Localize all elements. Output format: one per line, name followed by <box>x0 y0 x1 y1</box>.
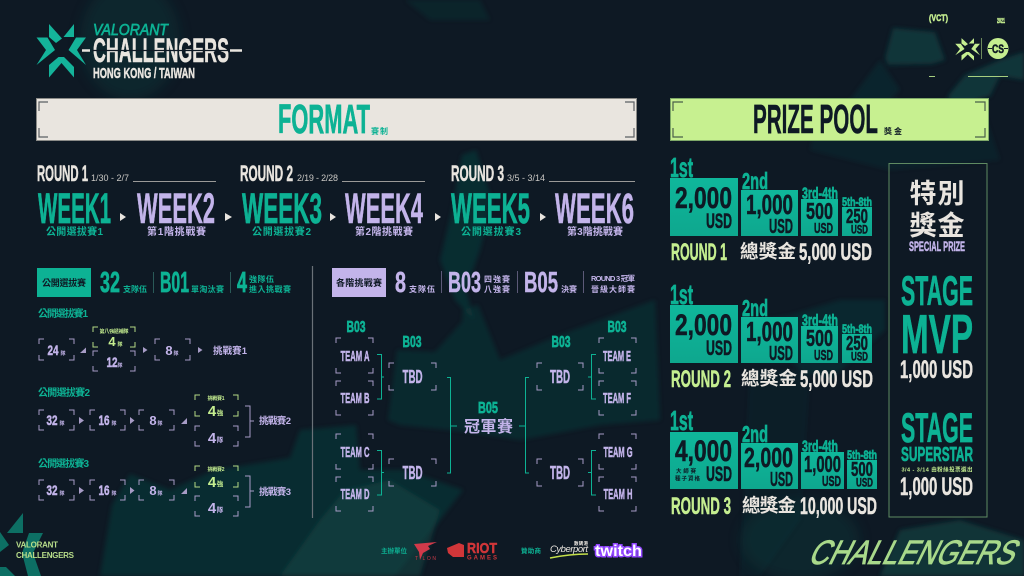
qualifier 2 flow <box>38 386 291 447</box>
bracket: right side: TBD <box>550 463 570 483</box>
panel: open qualifier <box>37 267 291 517</box>
qualifier 2 flow: 隊 <box>59 420 65 427</box>
panel: prize round 1 <box>670 152 872 266</box>
5th-8th prize: 250 <box>846 333 868 355</box>
heading: 特別獎金: 特別 <box>910 179 964 209</box>
3rd-4th prize: USD <box>814 220 833 237</box>
total: 總獎金 <box>741 368 797 389</box>
1st prize: 大師賽 <box>676 467 696 475</box>
stat: B03: 八強賽 <box>484 284 510 294</box>
3rd-4th prize: 3rd-4th <box>802 186 838 202</box>
stat: top 4: 進入挑戰賽 <box>249 284 291 294</box>
2nd prize: 2nd <box>742 295 768 321</box>
award: stage superstar: SUPERSTAR <box>901 444 973 466</box>
qualifier 3 flow: 公開選拔賽3 <box>38 457 89 470</box>
qualifier 3 flow: 8 <box>149 483 157 498</box>
heading: 特別獎金 <box>910 179 964 241</box>
qualifier 3 flow: 強 <box>217 479 224 488</box>
heading: 賽制: 賽 制 <box>371 126 388 136</box>
qualifier 3 flow: 32 <box>46 482 58 498</box>
qualifier 3 flow: 4 <box>208 500 217 517</box>
week 2: 第1階挑戰賽 <box>147 225 206 238</box>
stat: top 4 <box>237 267 291 299</box>
qualifier 2 flow: 4 <box>208 403 217 420</box>
arrow <box>225 213 232 221</box>
stat: B05: 決賽 <box>561 284 577 294</box>
week 3: WEEK3 <box>242 185 322 233</box>
bracket: left side: B03 <box>402 334 422 351</box>
qualifier 3 flow: 隊 <box>217 505 224 514</box>
3rd-4th prize <box>801 438 844 490</box>
footer: sponsors <box>521 540 642 560</box>
1st prize: 4,000 <box>675 435 732 468</box>
panel: prize header <box>670 96 988 142</box>
round 3 heading <box>451 161 635 186</box>
bracket: final: B05 <box>478 400 498 417</box>
logo: Cyberport: 數碼港 <box>574 540 588 547</box>
1st prize: 1st <box>670 279 693 310</box>
round label: ROUND 3 <box>671 493 731 520</box>
stat: B01: 單淘汰賽 <box>191 284 224 294</box>
tag: 各階挑戰賽 <box>332 268 386 297</box>
stat: 32 teams <box>100 267 147 299</box>
bracket: left side: B03 <box>346 319 366 336</box>
stat: top 4: 強隊伍 <box>249 274 274 284</box>
3rd-4th prize: 500 <box>806 198 833 224</box>
bracket: left side: TEAM D <box>340 487 370 503</box>
5th-8th prize: 5th-8th <box>842 322 872 336</box>
5th-8th prize <box>842 322 872 364</box>
logo: Riot Games: RIOT <box>467 541 497 557</box>
tag: 各階挑戰賽: 各階挑戰賽 <box>336 277 382 288</box>
qualifier 1 flow: 挑戰賽1 <box>213 345 248 357</box>
bracket: right side: TBD <box>550 367 570 387</box>
bracket: left side: TEAM A <box>340 349 370 365</box>
qualifier 2 flow: 4 <box>208 430 217 447</box>
2nd prize <box>741 295 798 365</box>
qualifier 2 flow: 8 <box>149 413 157 428</box>
week 6: 第3階挑戰賽 <box>567 225 623 238</box>
bracket: left side <box>336 319 457 511</box>
footer: sponsors: 贊助商 <box>521 546 542 555</box>
2nd prize <box>741 421 798 491</box>
qualifier 1 flow: 隊 <box>117 341 123 348</box>
panel: schedule: WEEK1 <box>38 185 111 233</box>
panel: prize round 3 <box>670 405 877 520</box>
arrow <box>435 213 441 221</box>
week 4: WEEK4 <box>345 185 423 233</box>
arrow <box>540 213 546 221</box>
3rd-4th prize: USD <box>822 473 841 490</box>
footer: left logo mark <box>0 513 43 576</box>
3rd-4th prize: USD <box>814 347 833 364</box>
logo: Twitch: twitch <box>595 543 642 560</box>
footer: valorant challengers <box>16 540 75 560</box>
1st prize <box>670 152 738 236</box>
week 2 <box>137 185 215 238</box>
stat: 8 teams: 8 <box>395 267 406 299</box>
stat: round 3 champion: ROUND 3 冠軍 <box>591 274 636 283</box>
qualifier 1 flow: 8 <box>165 343 173 358</box>
3rd-4th prize <box>801 312 838 364</box>
round 3 heading: ROUND 3 <box>451 161 504 186</box>
total: 總獎金 <box>740 241 796 262</box>
round 3 heading: 3/5 - 3/14 <box>507 173 545 183</box>
round label: ROUND 2 <box>671 366 731 393</box>
bracket: left side: TBD <box>402 367 422 387</box>
qualifier 2 flow: 挑戰賽2 <box>259 415 291 427</box>
bracket: right side: TEAM F <box>603 391 631 407</box>
bracket: right side <box>519 319 636 511</box>
total: 5,000 USD <box>799 239 872 266</box>
qualifier 3 flow: 挑戰賽2 <box>208 466 225 473</box>
1st prize <box>670 279 738 363</box>
2nd prize: 1,000 <box>746 316 793 347</box>
footer: valorant challengers: VALORANT <box>16 540 58 550</box>
2nd prize: USD <box>769 343 793 365</box>
footer: valorant challengers: CHALLENGERS <box>16 551 75 560</box>
qualifier 2 flow: 公開選拔賽2 <box>38 386 90 399</box>
logo: Cyberport <box>550 540 588 558</box>
1st prize: 1st <box>670 405 693 436</box>
qualifier 3 flow <box>38 457 291 517</box>
stat: B03: B03 <box>448 267 481 299</box>
1st prize: USD <box>706 210 732 233</box>
qualifier 2 flow: 隊 <box>111 420 117 427</box>
stat: top 4: 4 <box>237 267 247 299</box>
week 5 <box>451 185 530 238</box>
5th-8th prize: USD <box>851 350 868 364</box>
2nd prize: 1,000 <box>746 189 793 220</box>
1st prize: USD <box>706 337 732 360</box>
heading: FORMAT: FORMAT <box>278 96 370 142</box>
week 6 <box>555 185 634 238</box>
bracket: right side: TEAM E <box>603 349 631 365</box>
stat: 8 teams <box>395 267 435 299</box>
qualifier 2 flow: 16 <box>98 412 110 428</box>
qualifier 1 flow: 公開選拔賽1 <box>38 307 88 320</box>
1st prize: 2,000 <box>675 182 732 215</box>
arrow <box>330 213 336 221</box>
heading: 特別獎金: 獎金 <box>910 211 964 241</box>
brand: VALORANT: VALORANT <box>93 22 169 39</box>
icon: VCT logo <box>36 24 86 78</box>
logo: Valorant Challengers <box>36 22 242 82</box>
panel: format header <box>36 96 636 142</box>
round label: ROUND 1 <box>671 239 727 266</box>
3rd-4th prize: 3rd-4th <box>802 438 838 456</box>
footer: organisers: 主辦單位 <box>381 546 408 555</box>
brand: region: HONG KONG / TAIWAN <box>93 65 195 82</box>
round 2 heading: ROUND 2 <box>240 161 293 186</box>
qualifier 3 flow: 隊 <box>111 490 117 497</box>
round 1 heading: ROUND 1 <box>37 161 88 186</box>
qualifier 2 flow: 隊 <box>157 420 163 427</box>
qualifier 1 flow: 隊 <box>173 350 179 357</box>
icon: CS badge: CS <box>992 42 1004 56</box>
panel: prize round 2 <box>670 279 873 393</box>
brand: CHALLENGERS: CHALLENGERS <box>93 32 229 70</box>
round 1 heading <box>37 161 216 186</box>
award: stage superstar: 1,000 USD <box>900 473 973 501</box>
top-right VCT mark <box>929 13 1008 76</box>
2nd prize: USD <box>769 216 793 238</box>
bracket: final <box>464 400 513 436</box>
5th-8th prize: USD <box>856 476 873 490</box>
week 4 <box>345 185 423 238</box>
5th-8th prize <box>842 195 872 236</box>
stat: round 3 champion <box>591 274 636 294</box>
week 1 <box>38 185 111 238</box>
award: stage MVP: MVP <box>901 303 973 365</box>
5th-8th prize: 5th-8th <box>842 195 872 209</box>
label: VCT: (VCT) <box>929 13 948 23</box>
1st prize: 種子資格 <box>675 474 700 482</box>
total: 5,000 USD <box>800 366 873 393</box>
3rd-4th prize: 1,000 <box>804 451 841 477</box>
award: stage MVP <box>900 267 973 384</box>
qualifier 1 flow: 隊 <box>60 350 66 357</box>
panel: special prize <box>889 164 987 517</box>
5th-8th prize <box>847 448 877 490</box>
stat: 8 teams: 支隊伍 <box>409 284 435 294</box>
qualifier 1 flow: 4 <box>108 334 116 349</box>
bracket: right side: TEAM H <box>604 487 632 503</box>
round 2 heading: 2/19 - 2/28 <box>297 173 338 183</box>
tag: 公開選拔賽: 公開選拔賽 <box>42 277 86 288</box>
logo: Riot Games <box>447 541 497 562</box>
qualifier 3 flow: 4 <box>208 474 217 491</box>
1st prize: USD <box>706 463 732 486</box>
heading: PRIZE POOL: PRIZE POOL <box>753 96 878 142</box>
stat: B01: B01 <box>160 267 189 299</box>
qualifier 3 flow: 16 <box>98 482 110 498</box>
logo: Talon: T LON <box>415 556 436 562</box>
qualifier 2 flow: 強 <box>217 408 224 417</box>
3rd-4th prize <box>801 186 838 237</box>
2nd prize: USD <box>770 469 793 491</box>
qualifier 1 flow: 12 <box>106 354 118 370</box>
week 5: 公開選拔賽3 <box>461 225 521 238</box>
award: stage superstar: 3/4 - 3/14 由粉絲投票選出 <box>902 466 972 474</box>
qualifier 1 flow <box>38 307 248 371</box>
arrow <box>120 213 126 221</box>
week 3 <box>242 185 322 238</box>
5th-8th prize: 5th-8th <box>847 448 877 462</box>
bracket: left side: TEAM B <box>340 391 370 407</box>
panel: challengers stage <box>332 267 636 511</box>
bracket: left side: TBD <box>402 463 422 483</box>
week 6: WEEK6 <box>555 185 634 233</box>
award: stage MVP: 1,000 USD <box>900 356 973 384</box>
bracket: right side: B03 <box>608 319 627 336</box>
panel: schedule <box>37 161 635 238</box>
1st prize: 2,000 <box>675 309 732 342</box>
qualifier 1 flow: 第八強遞補隊 <box>100 328 128 335</box>
round 2 heading <box>240 161 425 186</box>
1st prize <box>670 405 738 489</box>
award: stage superstar <box>900 404 973 501</box>
logo: Cyberport: Cyberport <box>550 544 588 555</box>
bracket: final: 冠軍賽 <box>464 417 513 436</box>
label: year: 2021 <box>997 18 1005 25</box>
stat: B03: 四強賽 <box>484 274 510 284</box>
2nd prize: 2,000 <box>744 442 793 473</box>
week 1: 公開選拔賽1 <box>46 225 103 238</box>
background teal glow <box>80 0 860 576</box>
bracket: right side: B03 <box>552 334 571 351</box>
heading: special prize: SPECIAL PRIZE <box>909 239 965 254</box>
bracket: right side: TEAM G <box>604 445 632 461</box>
5th-8th prize: 250 <box>846 206 868 228</box>
3rd-4th prize: 500 <box>806 325 833 351</box>
week 3: 公開選拔賽2 <box>252 225 311 238</box>
week 5: WEEK5 <box>451 185 530 233</box>
2nd prize: 2nd <box>742 421 768 447</box>
heading: 獎金: 獎 金 <box>884 126 902 136</box>
week 4: 第2階挑戰賽 <box>355 225 413 238</box>
qualifier 1 flow: 隊 <box>117 362 123 369</box>
qualifier 3 flow: 隊 <box>59 490 65 497</box>
2nd prize <box>741 168 798 238</box>
qualifier 2 flow: 隊 <box>217 435 224 444</box>
stat: round 3 champion: 晉級大師賽 <box>591 284 635 294</box>
week 2: WEEK2 <box>137 185 215 233</box>
5th-8th prize: USD <box>851 222 868 236</box>
qualifier 3 flow: 挑戰賽3 <box>259 486 291 498</box>
stat: 32 teams: 32 <box>100 267 120 299</box>
total: 總獎金 <box>742 495 796 516</box>
3rd-4th prize: 3rd-4th <box>802 312 838 330</box>
total: 10,000 USD <box>800 493 877 520</box>
tag: 公開選拔賽 <box>37 268 91 297</box>
1st prize: 1st <box>670 152 693 183</box>
2nd prize: 2nd <box>742 168 768 194</box>
bracket: left side: TEAM C <box>340 445 370 461</box>
stat: B05: B05 <box>524 267 558 299</box>
logo: Riot Games: GAMES <box>467 556 497 562</box>
icon: small VCT logo <box>955 38 980 61</box>
total <box>742 493 877 520</box>
round 1 heading: 1/30 - 2/7 <box>91 173 129 183</box>
5th-8th prize: 500 <box>851 459 873 481</box>
total <box>740 239 872 266</box>
qualifier 2 flow: 挑戰賽1 <box>208 395 225 402</box>
total <box>741 366 873 393</box>
qualifier 3 flow: 隊 <box>157 490 163 497</box>
stat: 32 teams: 支隊伍 <box>123 284 147 294</box>
qualifier 1 flow: 24 <box>48 342 59 358</box>
footer: organisers <box>381 541 497 562</box>
qualifier 2 flow: 32 <box>46 412 58 428</box>
